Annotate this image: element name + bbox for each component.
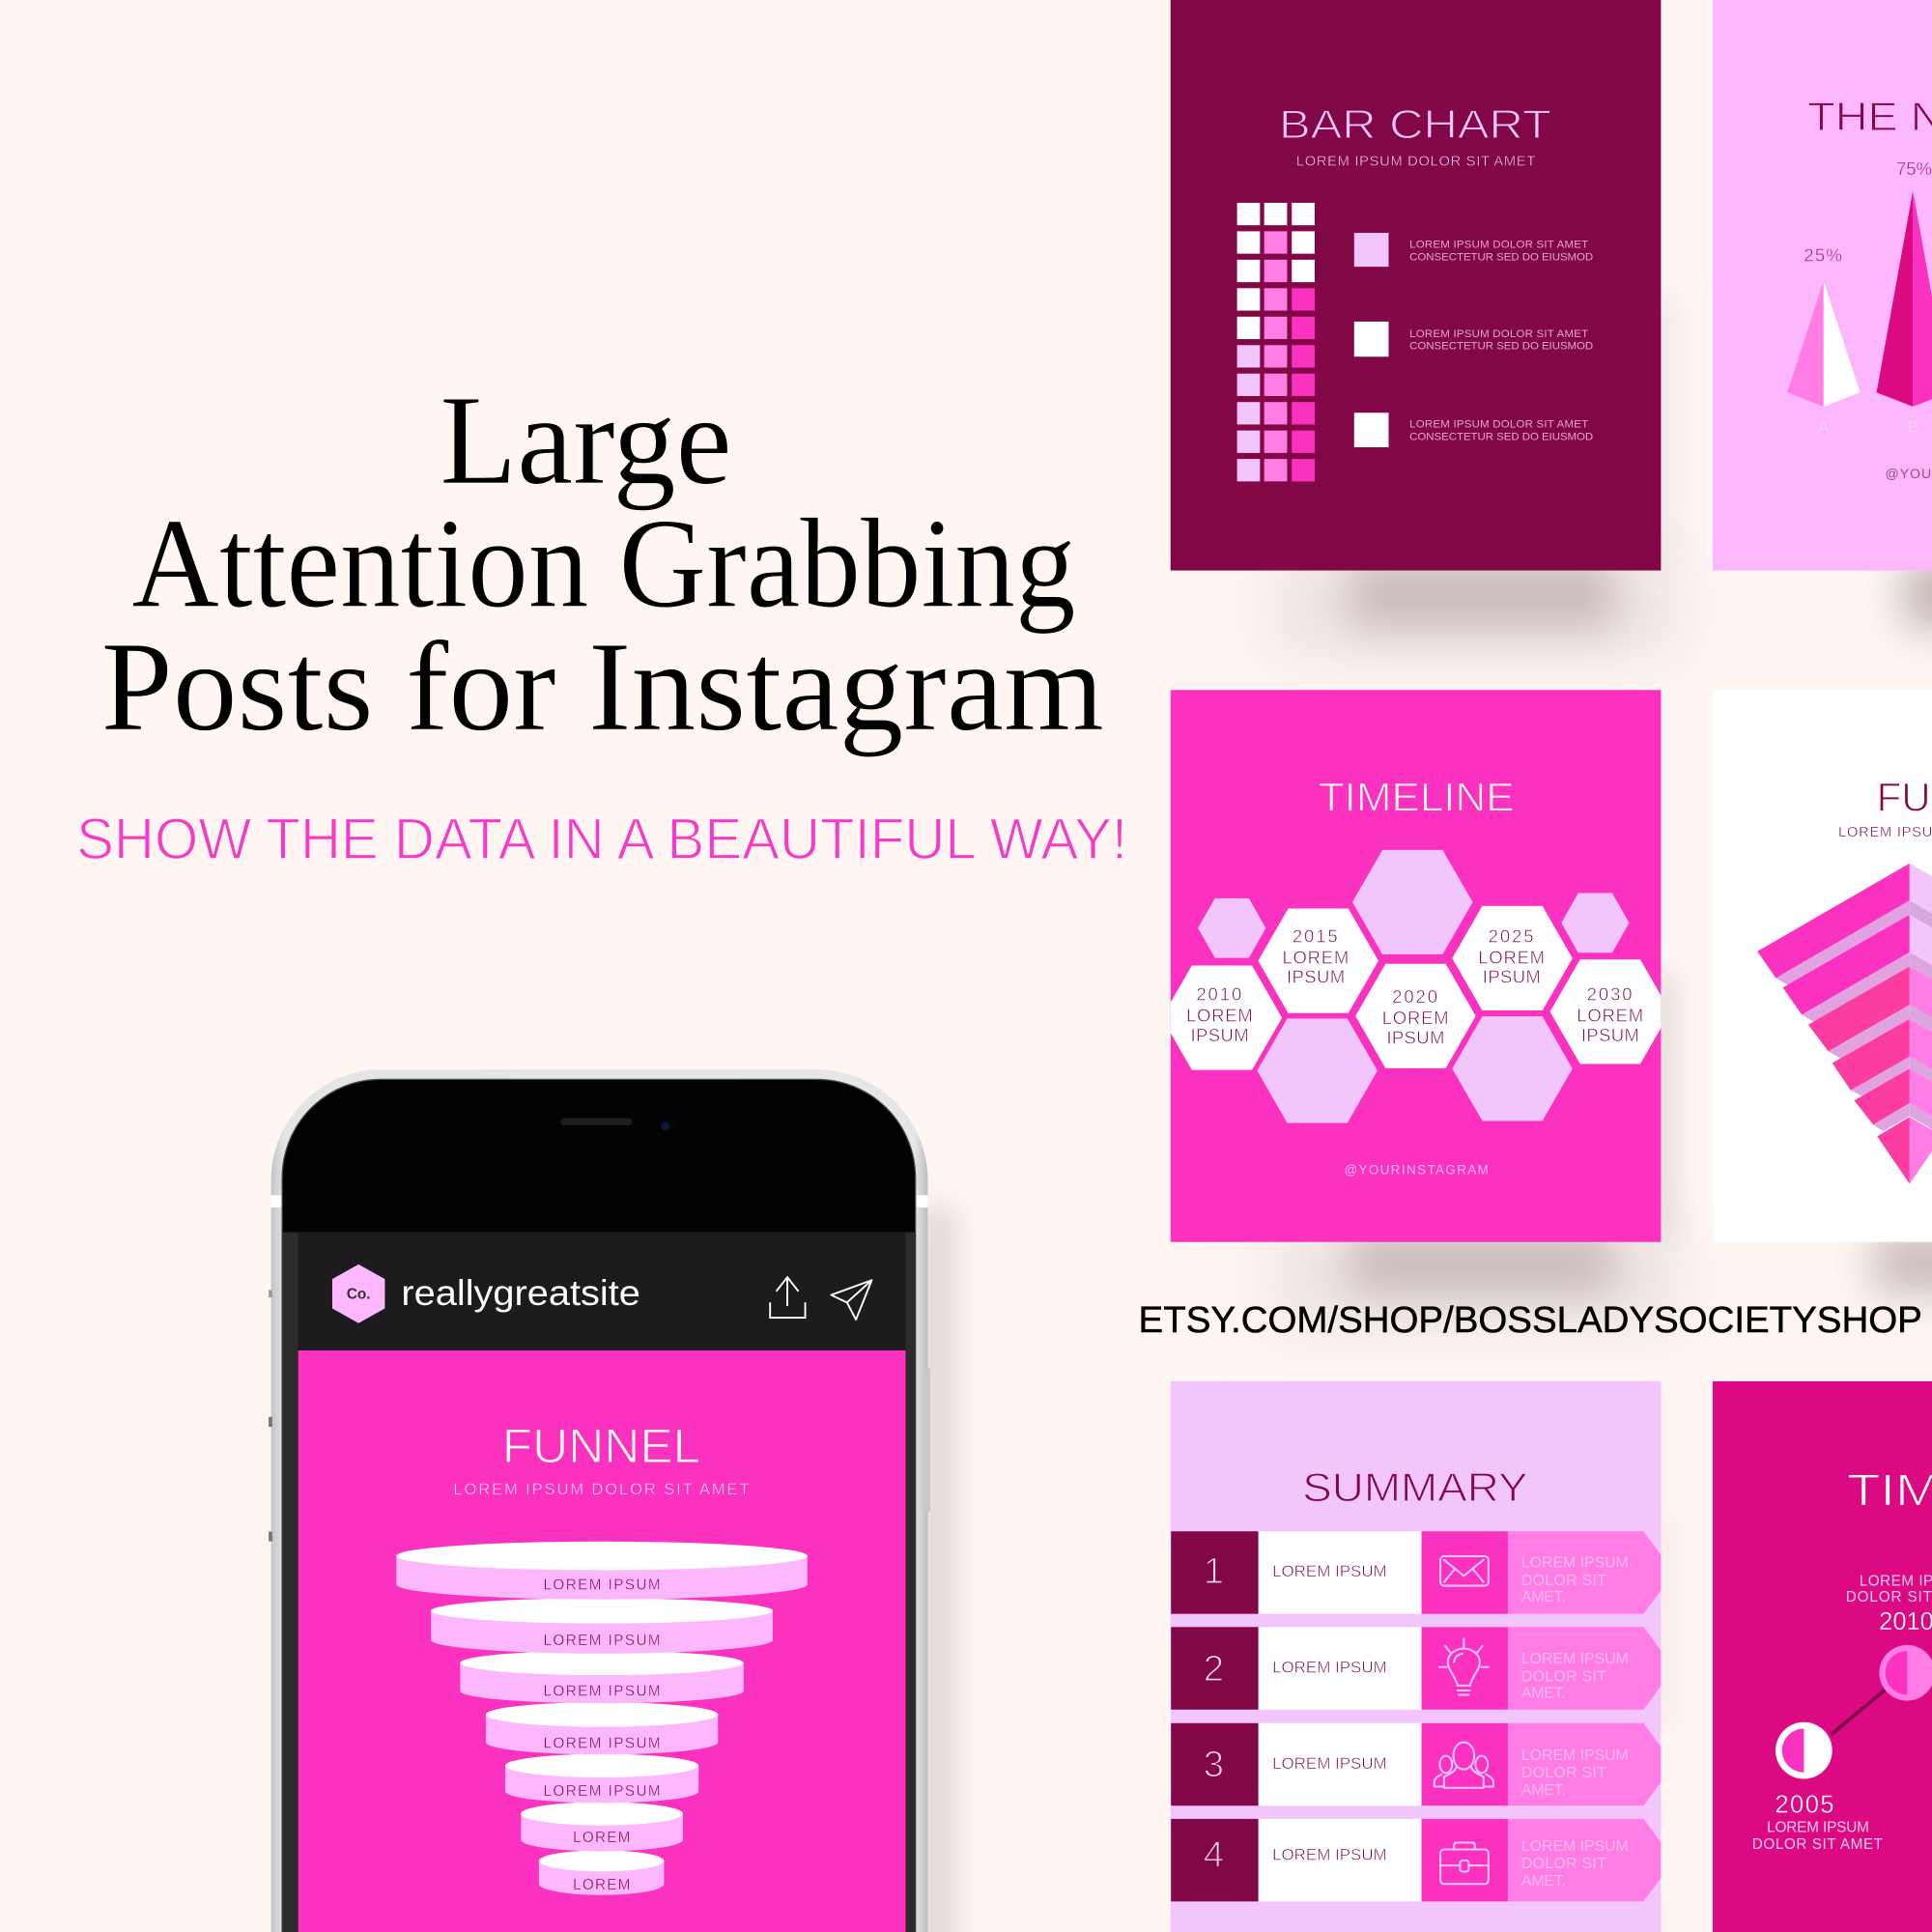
funnel tier 1: LOREM IPSUM xyxy=(543,1577,661,1593)
legend item 1 xyxy=(1354,233,1593,267)
year 2020 xyxy=(1382,986,1449,1047)
chart: square grid xyxy=(1237,203,1315,481)
summary row 3: 3 xyxy=(1204,1744,1224,1785)
year 2030: 2030 xyxy=(1587,984,1634,1005)
pyramid A xyxy=(1787,244,1861,437)
icon: envelope xyxy=(1440,1556,1489,1586)
year 2010: LOREM xyxy=(1186,1005,1254,1025)
year 2015 xyxy=(1282,926,1350,986)
bar chart heading: BAR CHART xyxy=(1279,101,1551,147)
pyramid A: 25% xyxy=(1804,244,1842,265)
year 2020: IPSUM xyxy=(1386,1027,1445,1047)
panel: timeline circles xyxy=(1713,1381,1932,1932)
funnel tier 6 xyxy=(521,1802,683,1851)
title: Large xyxy=(440,369,732,511)
year 2025: LOREM xyxy=(1478,947,1546,967)
summary row 1: AMET. xyxy=(1521,1589,1566,1605)
year 2010: 2010 xyxy=(1196,984,1243,1005)
year 2010 xyxy=(1186,984,1254,1045)
summary row 4: DOLOR SIT xyxy=(1521,1856,1606,1872)
funnel tier 7: LOREM xyxy=(573,1877,630,1893)
connector line xyxy=(1831,1690,1886,1735)
funnel tier 5: LOREM IPSUM xyxy=(543,1783,661,1800)
panel: the numbers pyramids xyxy=(1713,0,1932,571)
milestone 2005 xyxy=(1752,1722,1883,1853)
legend item 3: LOREM IPSUM DOLOR SIT AMET xyxy=(1409,419,1588,431)
milestone 2005: DOLOR SIT AMET xyxy=(1752,1836,1883,1853)
icon: light bulb xyxy=(1439,1638,1489,1694)
summary row 4: 4 xyxy=(1204,1833,1224,1875)
chart: layered pyramid xyxy=(1757,864,1932,1183)
title: Attention Grabbing xyxy=(131,493,1076,635)
summary row 4 xyxy=(1171,1819,1661,1901)
inverted pyramid subheading: LOREM IPSU xyxy=(1838,825,1932,840)
year 2020: 2020 xyxy=(1392,986,1439,1007)
summary row 1: DOLOR SIT xyxy=(1521,1573,1606,1589)
year 2015: 2015 xyxy=(1293,926,1340,947)
milestone 2010: LOREM IP xyxy=(1860,1574,1932,1590)
year 2025: 2025 xyxy=(1489,926,1535,947)
pyramid B xyxy=(1877,158,1932,437)
pyramids heading: THE N xyxy=(1807,94,1932,139)
summary row 1 xyxy=(1171,1531,1661,1614)
summary row 4: LOREM IPSUM xyxy=(1521,1838,1629,1855)
summary row 2: LOREM IPSUM xyxy=(1521,1651,1629,1667)
funnel tier 1 xyxy=(396,1542,808,1600)
pyramid B: B xyxy=(1908,418,1918,437)
summary row 2: 2 xyxy=(1204,1648,1224,1690)
funnel tier 4 xyxy=(486,1702,718,1754)
handle: @YOU xyxy=(1886,466,1932,481)
year 2025 xyxy=(1478,926,1546,986)
legend item 3: CONSECTETUR SED DO EIUSMOD xyxy=(1409,431,1593,442)
summary row 2: DOLOR SIT xyxy=(1521,1668,1606,1685)
phone screen: funnel post xyxy=(298,1350,906,1932)
icon: brand hexagon xyxy=(333,1265,384,1322)
bar chart subheading: LOREM IPSUM DOLOR SIT AMET xyxy=(1296,155,1535,170)
summary heading: SUMMARY xyxy=(1302,1464,1528,1510)
legend item 2: CONSECTETUR SED DO EIUSMOD xyxy=(1409,341,1593,353)
panel: summary xyxy=(1171,1381,1661,1932)
panel: bar chart xyxy=(1171,0,1661,571)
phone mockup xyxy=(269,1069,930,1932)
account name: reallygreatsite xyxy=(401,1273,640,1313)
legend item 2: LOREM IPSUM DOLOR SIT AMET xyxy=(1409,328,1588,340)
timeline heading: TIMELINE xyxy=(1319,774,1515,819)
funnel tier 6: LOREM xyxy=(573,1830,630,1846)
funnel tier 3 xyxy=(460,1651,744,1703)
summary row 4: AMET. xyxy=(1521,1873,1566,1889)
app header bar xyxy=(298,1233,906,1350)
summary row 3: DOLOR SIT xyxy=(1521,1765,1606,1781)
summary row 2 xyxy=(1171,1627,1661,1710)
year 2010: IPSUM xyxy=(1191,1025,1249,1045)
funnel tier 2 xyxy=(431,1598,773,1654)
summary row 1: LOREM IPSUM xyxy=(1521,1555,1629,1572)
funnel tier 2: LOREM IPSUM xyxy=(543,1633,661,1649)
year 2020: LOREM xyxy=(1382,1008,1449,1028)
timeline circles heading: TIM xyxy=(1847,1465,1932,1516)
summary row 2: LOREM IPSUM xyxy=(1272,1658,1387,1676)
year 2025: IPSUM xyxy=(1483,966,1541,986)
summary row 1: 1 xyxy=(1204,1550,1224,1592)
funnel tier 5 xyxy=(505,1754,698,1803)
milestone 2005: LOREM IPSUM xyxy=(1767,1820,1869,1836)
summary row 3: AMET. xyxy=(1521,1782,1566,1799)
phone body xyxy=(271,1069,927,1932)
shop url: ETSY.COM/SHOP/BOSSLADYSOCIETYSHOP xyxy=(1139,1299,1922,1341)
year 2015: IPSUM xyxy=(1287,966,1345,986)
icon: brand hexagon: Co. xyxy=(347,1286,371,1302)
year 2030: IPSUM xyxy=(1581,1025,1639,1045)
legend item 1: LOREM IPSUM DOLOR SIT AMET xyxy=(1409,240,1588,251)
speaker xyxy=(560,1119,632,1125)
milestone 2010 xyxy=(1846,1574,1932,1701)
title: Posts for Instagram xyxy=(101,615,1104,757)
hexagon cluster xyxy=(1162,850,1670,1122)
funnel tier 7 xyxy=(539,1850,664,1895)
funnel tier 3: LOREM IPSUM xyxy=(543,1684,661,1700)
handle: @YOURINSTAGRAM xyxy=(1345,1163,1489,1178)
pyramid B: 75% xyxy=(1896,158,1932,179)
camera xyxy=(661,1122,669,1130)
summary row 3 xyxy=(1171,1723,1661,1805)
summary row 3: LOREM IPSUM xyxy=(1272,1754,1387,1773)
pyramid A: A xyxy=(1818,418,1830,437)
title xyxy=(101,369,1104,757)
milestone 2010: DOLOR SIT xyxy=(1846,1589,1932,1605)
year 2015: LOREM xyxy=(1282,947,1350,967)
funnel heading: FUNNEL xyxy=(502,1419,700,1473)
legend item 1: CONSECTETUR SED DO EIUSMOD xyxy=(1409,252,1593,264)
year 2030 xyxy=(1577,984,1644,1045)
milestone 2005: 2005 xyxy=(1775,1791,1834,1818)
panel: timeline hexagons xyxy=(1162,690,1670,1242)
panel: inverted pyramid xyxy=(1713,690,1932,1242)
summary row 2: AMET. xyxy=(1521,1686,1566,1702)
year 2030: LOREM xyxy=(1577,1005,1644,1025)
icon: people xyxy=(1435,1743,1493,1788)
phone bezel xyxy=(282,1079,916,1932)
funnel subheading: LOREM IPSUM DOLOR SIT AMET xyxy=(453,1480,750,1498)
legend item 3 xyxy=(1354,412,1593,447)
funnel tier 4: LOREM IPSUM xyxy=(543,1736,661,1752)
legend item 2 xyxy=(1354,322,1593,356)
subtitle: SHOW THE DATA IN A BEAUTIFUL WAY! xyxy=(76,807,1127,871)
icon: upload xyxy=(770,1277,806,1318)
inverted pyramid heading: FU xyxy=(1877,774,1931,819)
summary row 1: LOREM IPSUM xyxy=(1272,1562,1387,1580)
summary row 4: LOREM IPSUM xyxy=(1272,1845,1387,1863)
icon: send xyxy=(831,1280,871,1320)
summary row 3: LOREM IPSUM xyxy=(1521,1747,1629,1764)
icon: briefcase xyxy=(1440,1843,1489,1884)
